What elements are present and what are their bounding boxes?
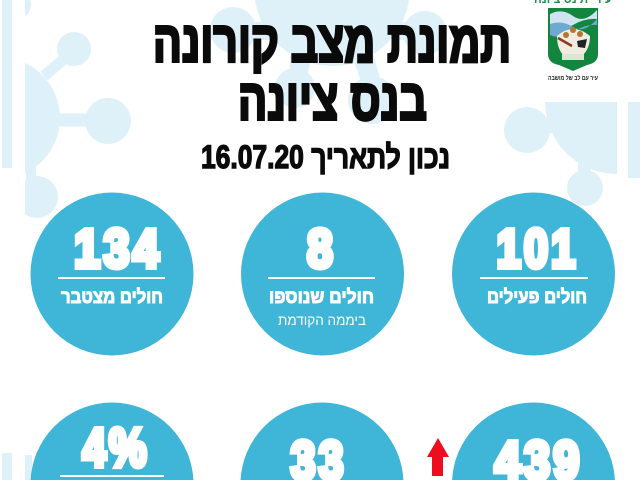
stat: cumulative patients	[30, 192, 194, 356]
background virus: bottom left	[2, 453, 32, 480]
stat: 4 percent: 4%	[82, 418, 150, 478]
stat: new patients: ביממה הקודמת	[278, 312, 366, 328]
subtitle: date: נכון לתאריך 16.07.20	[201, 139, 450, 175]
stat: 4 percent	[30, 402, 194, 480]
stat: 439	[452, 402, 615, 480]
stat: new patients	[241, 192, 404, 356]
logo: Ness Ziona emblem: עיר עם לב של מושבה	[548, 74, 598, 82]
stat: cumulative patients: חולים מצטבר	[61, 287, 163, 308]
stat: new patients: 8	[307, 219, 336, 279]
logo: Ness Ziona emblem	[534, 0, 612, 82]
stat: active patients: 101	[497, 220, 578, 279]
stat: 33	[240, 402, 404, 480]
title: בנס ציונה	[238, 68, 427, 132]
background virus: top center	[210, 0, 447, 124]
stat: new patients: חולים שנוספו	[269, 287, 374, 308]
background virus: right	[504, 102, 640, 206]
stat: active patients	[452, 192, 615, 356]
stat: cumulative patients: 134	[74, 218, 162, 279]
background virus: left	[0, 0, 131, 218]
stat: active patients: חולים פעילים	[487, 287, 587, 308]
icon: red up arrow	[427, 438, 449, 476]
title: תמונת מצב קורונה	[153, 10, 511, 74]
title	[153, 10, 511, 132]
